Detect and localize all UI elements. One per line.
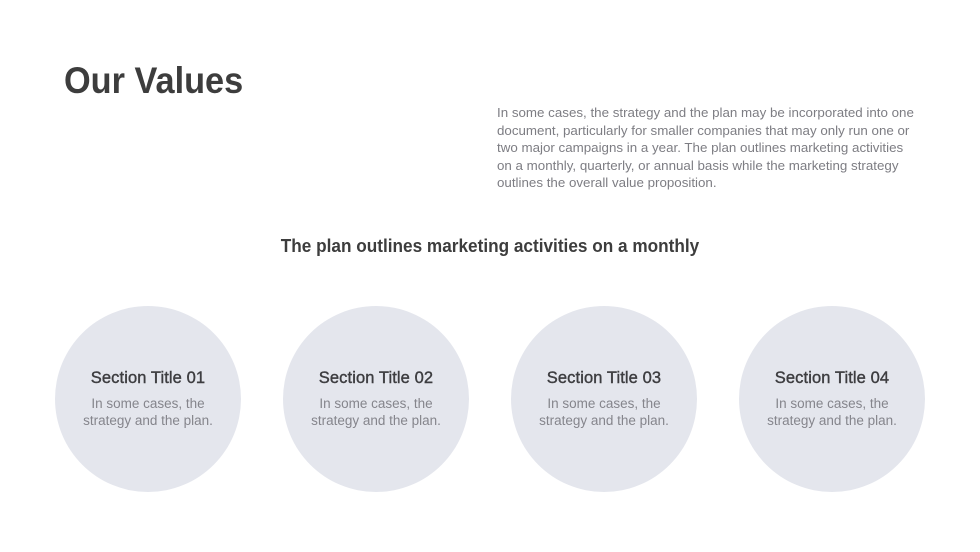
intro text block: outlines the overall value proposition.	[497, 175, 717, 190]
section 02 title: Section Title 02	[319, 369, 433, 387]
title: Our Values	[64, 60, 243, 101]
section 04 text: In some cases, the	[775, 396, 889, 410]
intro text block: two major campaigns in a year. The plan outlines marketing activities	[497, 140, 903, 155]
section 01 text: In some cases, the	[91, 396, 205, 410]
section 02 text	[311, 396, 441, 428]
section 02 text: In some cases, the	[319, 396, 433, 410]
intro text block	[497, 105, 914, 190]
section 01 text	[83, 396, 213, 428]
section 03 text	[539, 396, 669, 428]
section 01 title: Section Title 01	[91, 369, 205, 387]
intro text block: on a monthly, quarterly, or annual basis while the marketing strategy	[497, 158, 899, 172]
section 03 text: strategy and the plan.	[539, 413, 669, 428]
panel: section 02 circle	[283, 306, 469, 492]
section 03 text: In some cases, the	[547, 396, 661, 410]
section 04 text	[767, 396, 897, 428]
panel: section 01 circle	[55, 306, 241, 492]
section 04 title: Section Title 04	[775, 369, 889, 387]
section 04 text: strategy and the plan.	[767, 413, 897, 428]
section 03 title: Section Title 03	[547, 369, 661, 387]
intro text block: In some cases, the strategy and the plan may be incorporated into one	[497, 105, 914, 120]
subheading: The plan outlines marketing activities on a monthly	[281, 236, 699, 256]
panel: section 04 circle	[739, 306, 925, 492]
intro text block: document, particularly for smaller companies that may only run one or	[497, 122, 909, 138]
section 02 text: strategy and the plan.	[311, 413, 441, 428]
section 01 text: strategy and the plan.	[83, 413, 213, 428]
panel: section 03 circle	[511, 306, 697, 492]
